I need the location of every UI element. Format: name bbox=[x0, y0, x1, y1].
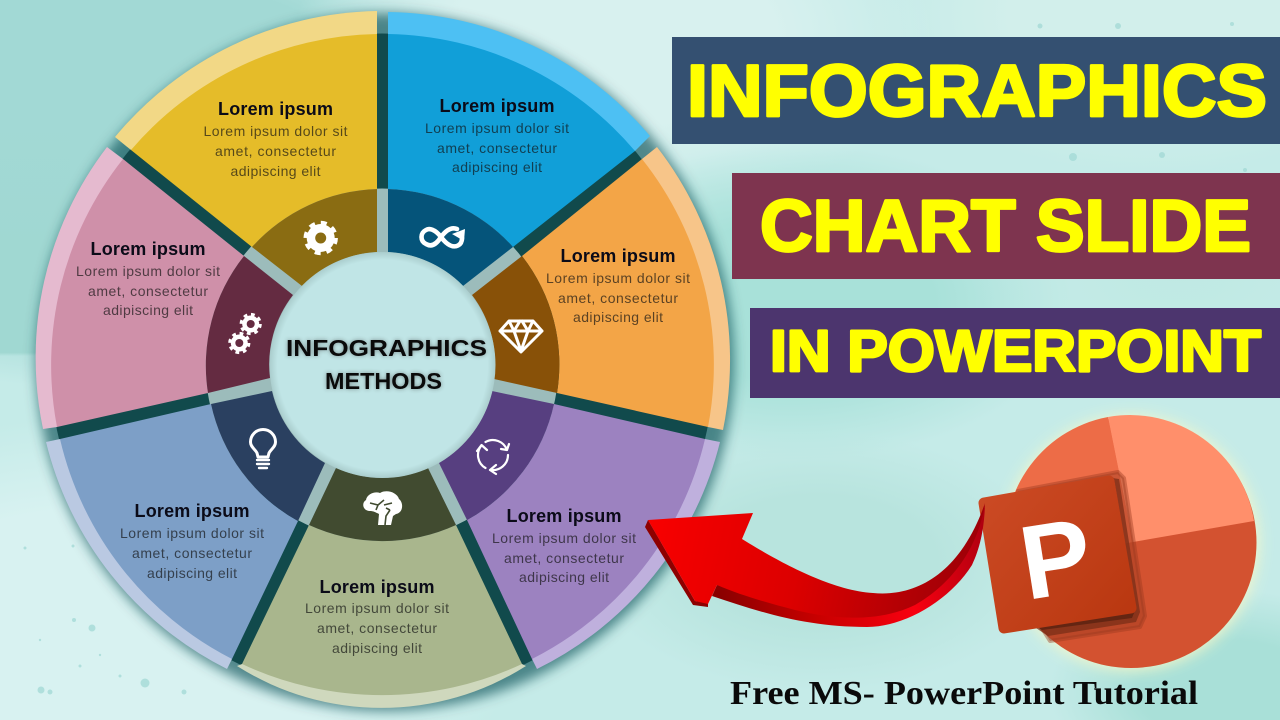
green text: adipiscing elit bbox=[332, 640, 422, 656]
icon: refresh cycle bbox=[477, 440, 509, 474]
orange text: Lorem ipsum bbox=[560, 246, 676, 266]
yellow main panel bbox=[131, 34, 377, 247]
blue main panel bbox=[388, 34, 635, 247]
heading box: in powerpoint bbox=[750, 308, 1280, 398]
center title: METHODS bbox=[325, 368, 442, 394]
purple main panel bbox=[467, 404, 705, 659]
green text bbox=[305, 577, 449, 656]
segment: purple bbox=[439, 391, 720, 669]
pink text: Lorem ipsum bbox=[90, 239, 206, 259]
green outer band bbox=[237, 664, 526, 708]
blue text: Lorem ipsum dolor sit bbox=[425, 120, 569, 136]
yellow outer band bbox=[115, 11, 377, 150]
yellow icon wedge bbox=[252, 189, 377, 286]
purple text: Lorem ipsum dolor sit bbox=[492, 530, 636, 546]
orange icon wedge bbox=[472, 256, 559, 393]
icon: brain bbox=[363, 491, 402, 525]
arrow: red curved arrow bbox=[645, 503, 985, 627]
pink text bbox=[76, 239, 220, 318]
green text: Lorem ipsum dolor sit bbox=[305, 600, 449, 616]
yellow text: adipiscing elit bbox=[230, 163, 321, 179]
wheel grey hub spokes bbox=[206, 188, 558, 542]
icon: light bulb bbox=[250, 430, 276, 468]
blue text: adipiscing elit bbox=[452, 159, 542, 175]
center title: INFOGRAPHICS bbox=[286, 335, 487, 361]
icon: diamond bbox=[500, 321, 542, 352]
blue text: Lorem ipsum bbox=[440, 96, 554, 116]
arrow top face bbox=[648, 503, 985, 618]
segment: orange bbox=[472, 147, 730, 430]
wheel dark spoke base bbox=[50, 34, 714, 696]
green main panel bbox=[242, 525, 522, 695]
yellow text: Lorem ipsum dolor sit bbox=[204, 123, 348, 139]
yellow text bbox=[204, 99, 348, 179]
arrow side edge bbox=[645, 520, 708, 607]
green text: Lorem ipsum bbox=[320, 577, 434, 597]
light blue icon wedge bbox=[211, 391, 325, 521]
orange text: adipiscing elit bbox=[573, 309, 663, 325]
orange main panel bbox=[522, 159, 714, 427]
orange text: amet, consectetur bbox=[558, 290, 678, 306]
segment: pink bbox=[36, 147, 293, 429]
logo glow bbox=[1003, 415, 1259, 671]
icon: two gears bbox=[230, 314, 260, 352]
pink text: Lorem ipsum dolor sit bbox=[76, 263, 220, 279]
segment: yellow bbox=[115, 11, 377, 286]
light blue text bbox=[120, 501, 264, 581]
green text: amet, consectetur bbox=[317, 620, 437, 636]
segment: green bbox=[237, 468, 526, 708]
blue icon wedge bbox=[388, 189, 513, 286]
yellow text: amet, consectetur bbox=[215, 143, 336, 159]
heading box: infographics: INFOGRAPHICS bbox=[687, 51, 1267, 132]
light blue text: adipiscing elit bbox=[147, 565, 237, 581]
light blue text: Lorem ipsum dolor sit bbox=[120, 525, 264, 541]
purple text: Lorem ipsum bbox=[506, 506, 622, 526]
arrow underside bbox=[712, 505, 985, 627]
purple text: amet, consectetur bbox=[504, 550, 624, 566]
center title bbox=[286, 335, 487, 394]
pink text: amet, consectetur bbox=[88, 283, 208, 299]
center hub circle bbox=[270, 252, 496, 478]
light blue main panel bbox=[60, 404, 298, 659]
wheel shadow bbox=[36, 13, 734, 711]
light blue text: amet, consectetur bbox=[132, 545, 252, 561]
segment: light blue bbox=[46, 391, 325, 669]
light blue outer band bbox=[46, 439, 232, 669]
center title: METHODS bbox=[325, 368, 442, 394]
blue text: amet, consectetur bbox=[437, 140, 557, 156]
heading box: in powerpoint: IN POWERPOINT bbox=[770, 319, 1261, 384]
orange text bbox=[546, 246, 690, 325]
heading box: chart slide: CHART SLIDE bbox=[760, 186, 1251, 267]
logo disc bbox=[1005, 415, 1256, 668]
green icon wedge bbox=[309, 468, 456, 541]
heading box: chart slide bbox=[732, 173, 1280, 279]
purple text: adipiscing elit bbox=[519, 569, 609, 585]
purple icon wedge bbox=[439, 391, 554, 520]
heading box: infographics bbox=[672, 37, 1280, 144]
footer text: Free MS- PowerPoint Tutorial bbox=[730, 675, 1198, 712]
purple outer band bbox=[532, 439, 720, 669]
segment: blue bbox=[388, 12, 650, 286]
yellow text: Lorem ipsum bbox=[218, 99, 333, 119]
orange text: Lorem ipsum dolor sit bbox=[546, 270, 690, 286]
light blue text: Lorem ipsum bbox=[134, 501, 250, 521]
blue text bbox=[425, 96, 569, 175]
icon: gear bbox=[306, 223, 336, 253]
pink icon wedge bbox=[206, 256, 293, 393]
pink outer band bbox=[36, 147, 123, 429]
logo tile bbox=[984, 481, 1131, 628]
pink text: adipiscing elit bbox=[103, 302, 193, 318]
blue outer band bbox=[388, 12, 650, 151]
logo tile shadow bbox=[1018, 472, 1145, 641]
orange outer band bbox=[642, 147, 730, 430]
icon: infinity loop bbox=[422, 228, 465, 246]
icon: powerpoint logo bbox=[984, 415, 1259, 671]
center title: INFOGRAPHICS bbox=[286, 335, 487, 361]
logo letter: P bbox=[1012, 496, 1100, 623]
pink main panel bbox=[51, 159, 244, 427]
purple text bbox=[492, 506, 636, 585]
